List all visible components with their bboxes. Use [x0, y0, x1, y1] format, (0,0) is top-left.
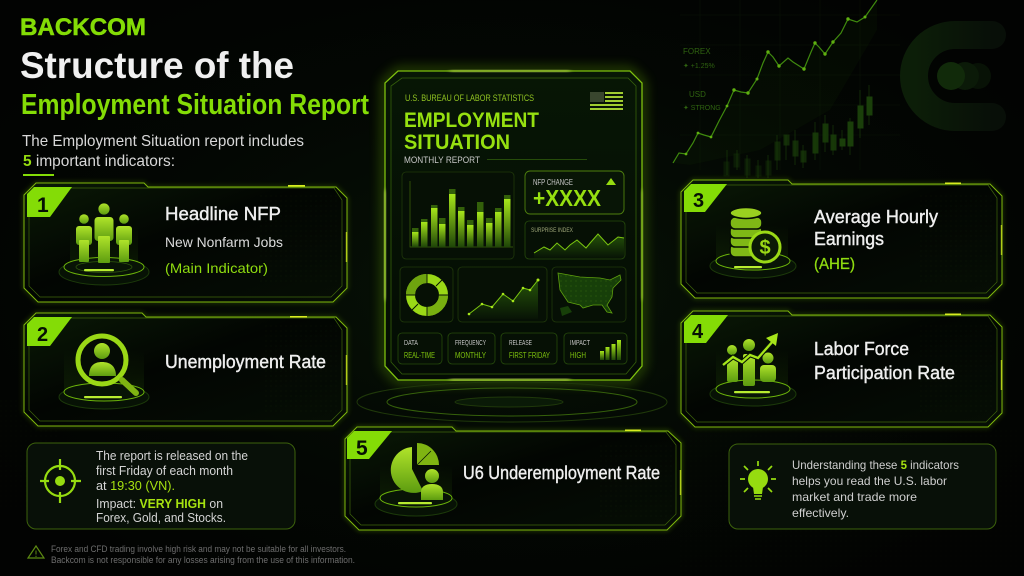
panel header: SITUATION — [404, 131, 510, 154]
icon: coin stack with dollar — [710, 208, 796, 278]
title: Employment Situation Report — [21, 89, 369, 121]
stat tile: release — [501, 333, 557, 364]
badge 2 — [27, 317, 72, 346]
icon: three people on pedestal — [59, 203, 149, 285]
release text: The report is released on the — [96, 449, 248, 463]
icon: pie chart and person — [375, 443, 457, 516]
badge 4 — [684, 315, 728, 343]
badge 4: 4 — [692, 321, 704, 343]
stat tile: frequency: FREQUENCY — [455, 338, 486, 347]
release text: Impact: VERY HIGH on — [96, 497, 223, 511]
card 5: U6 Underemployment Rate — [345, 427, 681, 530]
brand logo: BACKCOM — [20, 14, 146, 41]
card 1 text: Headline NFP — [165, 204, 281, 224]
disclaimer: Forex and CFD trading involve high risk and may not be suitable for all investors. — [51, 544, 346, 554]
U.S. map — [552, 267, 626, 322]
badge 1 — [27, 187, 72, 217]
card 4 text — [814, 339, 955, 383]
takeaway text: Understanding these 5 indicators — [792, 458, 959, 472]
title — [20, 45, 369, 121]
panel header — [404, 93, 587, 166]
card 3 text: (AHE) — [814, 256, 855, 273]
platform rings under panel — [357, 382, 667, 422]
stat tile: frequency — [448, 333, 495, 364]
stat tile: data — [398, 333, 442, 364]
card 4: Labor Force Participation Rate — [681, 311, 1002, 427]
stat tile: impact: HIGH — [570, 350, 586, 360]
bar chart — [402, 172, 514, 259]
release text — [96, 449, 248, 525]
disclaimer — [28, 544, 355, 565]
NFP change box: NFP CHANGE — [533, 178, 573, 187]
stat tile: data: REAL-TIME — [404, 350, 435, 360]
panel header: MONTHLY REPORT — [404, 155, 480, 166]
donut chart — [400, 267, 453, 322]
takeaway text: effectively. — [792, 506, 849, 520]
badge 3 — [684, 184, 727, 212]
panel header: U.S. BUREAU OF LABOR STATISTICS — [405, 93, 534, 103]
badge 1: 1 — [37, 194, 49, 217]
surprise index sparkline: SURPRISE INDEX — [531, 227, 574, 234]
icon: warning triangle — [28, 546, 44, 558]
takeaway text: helps you read the U.S. labor — [792, 474, 947, 488]
card 1 text — [165, 204, 283, 276]
stat tile: release: FIRST FRIDAY — [509, 350, 550, 360]
badge 3: 3 — [693, 190, 704, 212]
icon: people with rising arrow — [710, 333, 796, 406]
NFP change box: +XXXX — [533, 185, 602, 211]
card 2 text: Unemployment Rate — [165, 352, 326, 372]
stat tile: release: RELEASE — [509, 338, 532, 347]
badge 5: 5 — [356, 437, 368, 460]
takeaway box — [729, 444, 996, 529]
release text: first Friday of each month — [96, 464, 233, 478]
card 4 text: Participation Rate — [814, 363, 955, 383]
background chart: forex line and candles: ✦ +1.25% — [683, 62, 715, 70]
badge 5 — [347, 431, 392, 460]
release text: Forex, Gold, and Stocks. — [96, 511, 226, 525]
card 1: Headline NFP — [24, 183, 347, 302]
takeaway text — [792, 458, 959, 520]
NFP change box — [525, 171, 624, 214]
flag icon — [590, 92, 623, 112]
takeaway text: market and trade more — [792, 490, 917, 504]
badge 2: 2 — [37, 324, 48, 346]
card 3 text — [814, 207, 938, 273]
icon: target — [40, 459, 81, 503]
card 3 text: Earnings — [814, 229, 884, 249]
release text: at 19:30 (VN). — [96, 479, 175, 493]
disclaimer: Backcom is not responsible for any losses arising from the use of this information. — [51, 555, 355, 565]
icon: coin stack with dollar: $ — [759, 237, 771, 259]
intro text: The Employment Situation report includes — [22, 133, 304, 150]
release info box — [27, 443, 295, 529]
card 1 text: (Main Indicator) — [165, 260, 268, 276]
stat tile: frequency: MONTHLY — [455, 350, 486, 360]
watermark logo — [914, 35, 992, 117]
intro text — [22, 133, 304, 176]
card 3 text: Average Hourly — [814, 207, 938, 227]
background chart: forex line and candles: ✦ STRONG — [683, 104, 721, 112]
panel header: EMPLOYMENT — [404, 109, 539, 132]
card 5 text: U6 Underemployment Rate — [463, 463, 660, 483]
intro text: 5 important indicators: — [23, 153, 175, 170]
icon: magnifier over person — [59, 336, 149, 409]
surprise index sparkline — [525, 221, 625, 259]
line chart — [458, 267, 547, 322]
card 4 text: Labor Force — [814, 339, 909, 359]
stat tile: impact: IMPACT — [570, 338, 590, 347]
stat tile: data: DATA — [404, 338, 418, 347]
card 3: Average Hourly Earnings — [681, 180, 1002, 298]
title: Structure of the — [20, 45, 294, 86]
icon: light bulb — [740, 461, 776, 499]
central report panel — [384, 70, 643, 380]
stat tile: impact — [564, 333, 627, 364]
background chart: forex line and candles — [673, 0, 900, 178]
card 2: Unemployment Rate — [24, 313, 347, 426]
background chart: forex line and candles: USD — [689, 90, 706, 99]
background chart: forex line and candles: FOREX — [683, 47, 711, 56]
card 1 text: New Nonfarm Jobs — [165, 234, 283, 250]
